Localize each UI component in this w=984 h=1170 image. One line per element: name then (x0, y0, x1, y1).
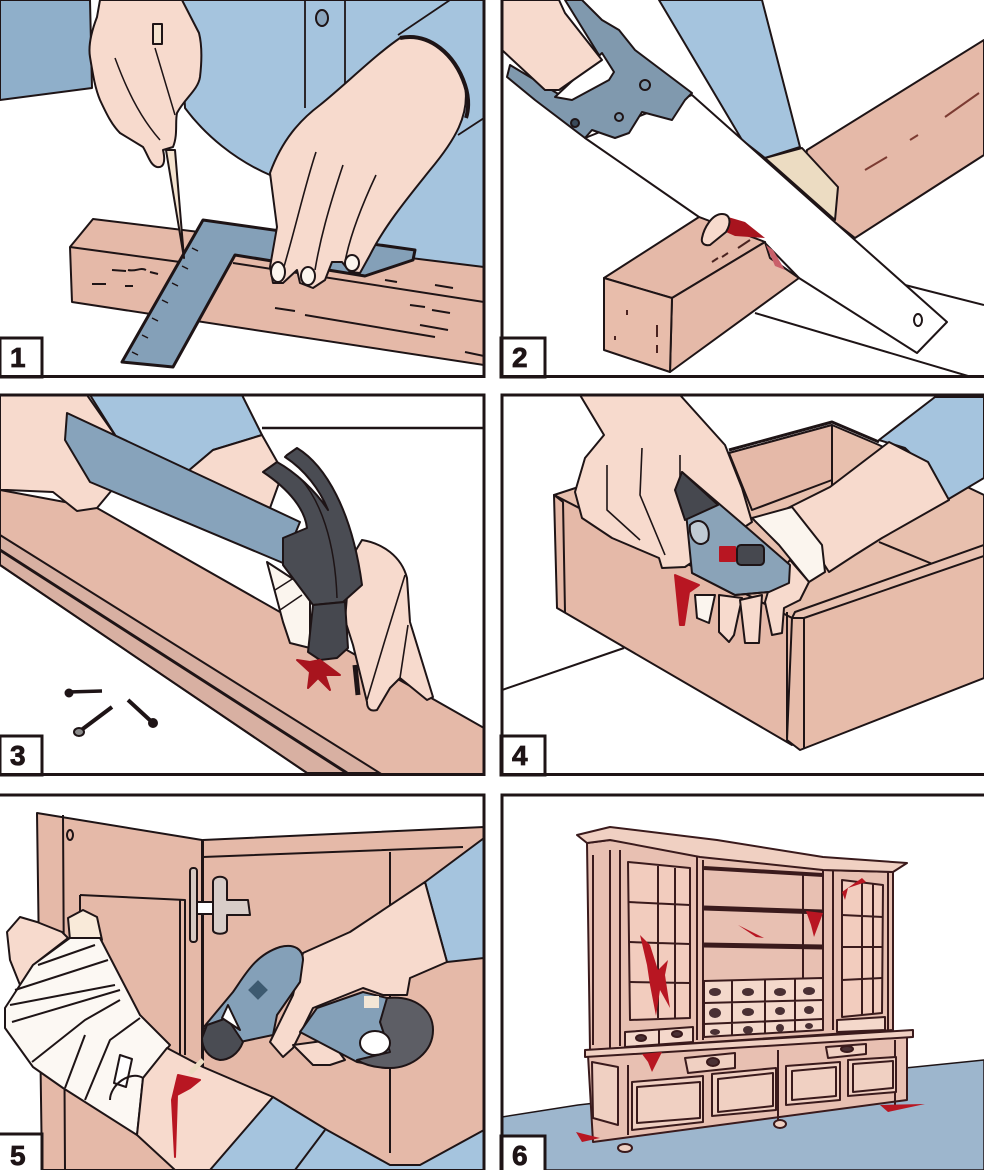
cabinet upper body (577, 827, 907, 1050)
gripping hand (502, 0, 602, 90)
apothecary drawers (704, 978, 823, 1037)
label 2 (501, 338, 545, 377)
base (585, 1030, 913, 1152)
label 1: 1 (10, 342, 26, 373)
panel 4: planing box (502, 395, 984, 750)
panel 2: sawing (502, 0, 984, 376)
blood (172, 1075, 200, 1157)
shirt (0, 0, 484, 270)
sleeve (879, 397, 984, 500)
blood (675, 575, 699, 625)
wounded forearm and sleeve (137, 1048, 484, 1170)
small drawers under glass (625, 1017, 885, 1047)
bandaged hand (5, 910, 170, 1135)
saw handle (507, 0, 692, 138)
injured hand with bandaged thumb (267, 540, 433, 711)
arm (659, 0, 838, 220)
hinge (190, 868, 250, 942)
right hand (270, 37, 468, 288)
nails (66, 690, 157, 736)
hammer (65, 413, 362, 660)
bandage (752, 507, 825, 582)
panel 1: marking wood with pencil and square (0, 0, 484, 367)
glass doors (628, 862, 883, 1020)
label 4 (501, 736, 545, 775)
blood stains (576, 878, 925, 1142)
centre shelves (704, 868, 823, 978)
far beam (800, 40, 984, 238)
wood block (604, 217, 799, 372)
sleeve and forearm (90, 395, 283, 508)
lower hand fingers (695, 560, 809, 643)
panel 6: finished cabinet with blood stains (502, 827, 984, 1170)
lower drawers and cupboards (632, 1044, 896, 1130)
forearm (788, 442, 949, 572)
label 4: 4 (512, 740, 528, 771)
carpenter square (122, 220, 415, 367)
cordless drill (190, 946, 433, 1073)
label 6 (501, 1136, 545, 1170)
left hand with pencil (89, 0, 201, 258)
right arm (270, 838, 484, 1065)
wood beam (70, 219, 484, 365)
hand on plane (575, 395, 752, 568)
saw blade (585, 95, 947, 353)
label 2: 2 (512, 342, 528, 373)
cut finger and blood (702, 214, 785, 270)
table line (502, 648, 624, 690)
label 5 (0, 1134, 42, 1170)
panel 5: drilling (5, 813, 484, 1170)
label 1 (0, 338, 42, 377)
box front faces (554, 495, 984, 750)
floor (502, 1060, 984, 1170)
plane tool (675, 472, 790, 595)
box interior (554, 422, 984, 618)
driven nail (355, 665, 358, 695)
blood (297, 660, 340, 690)
cabinet (37, 813, 484, 1170)
left hand (0, 395, 117, 511)
label 3 (0, 736, 42, 775)
background line and wood plank (0, 428, 484, 775)
table edges (755, 285, 984, 376)
panel 3: hammering (0, 395, 484, 775)
label 3: 3 (10, 740, 26, 771)
